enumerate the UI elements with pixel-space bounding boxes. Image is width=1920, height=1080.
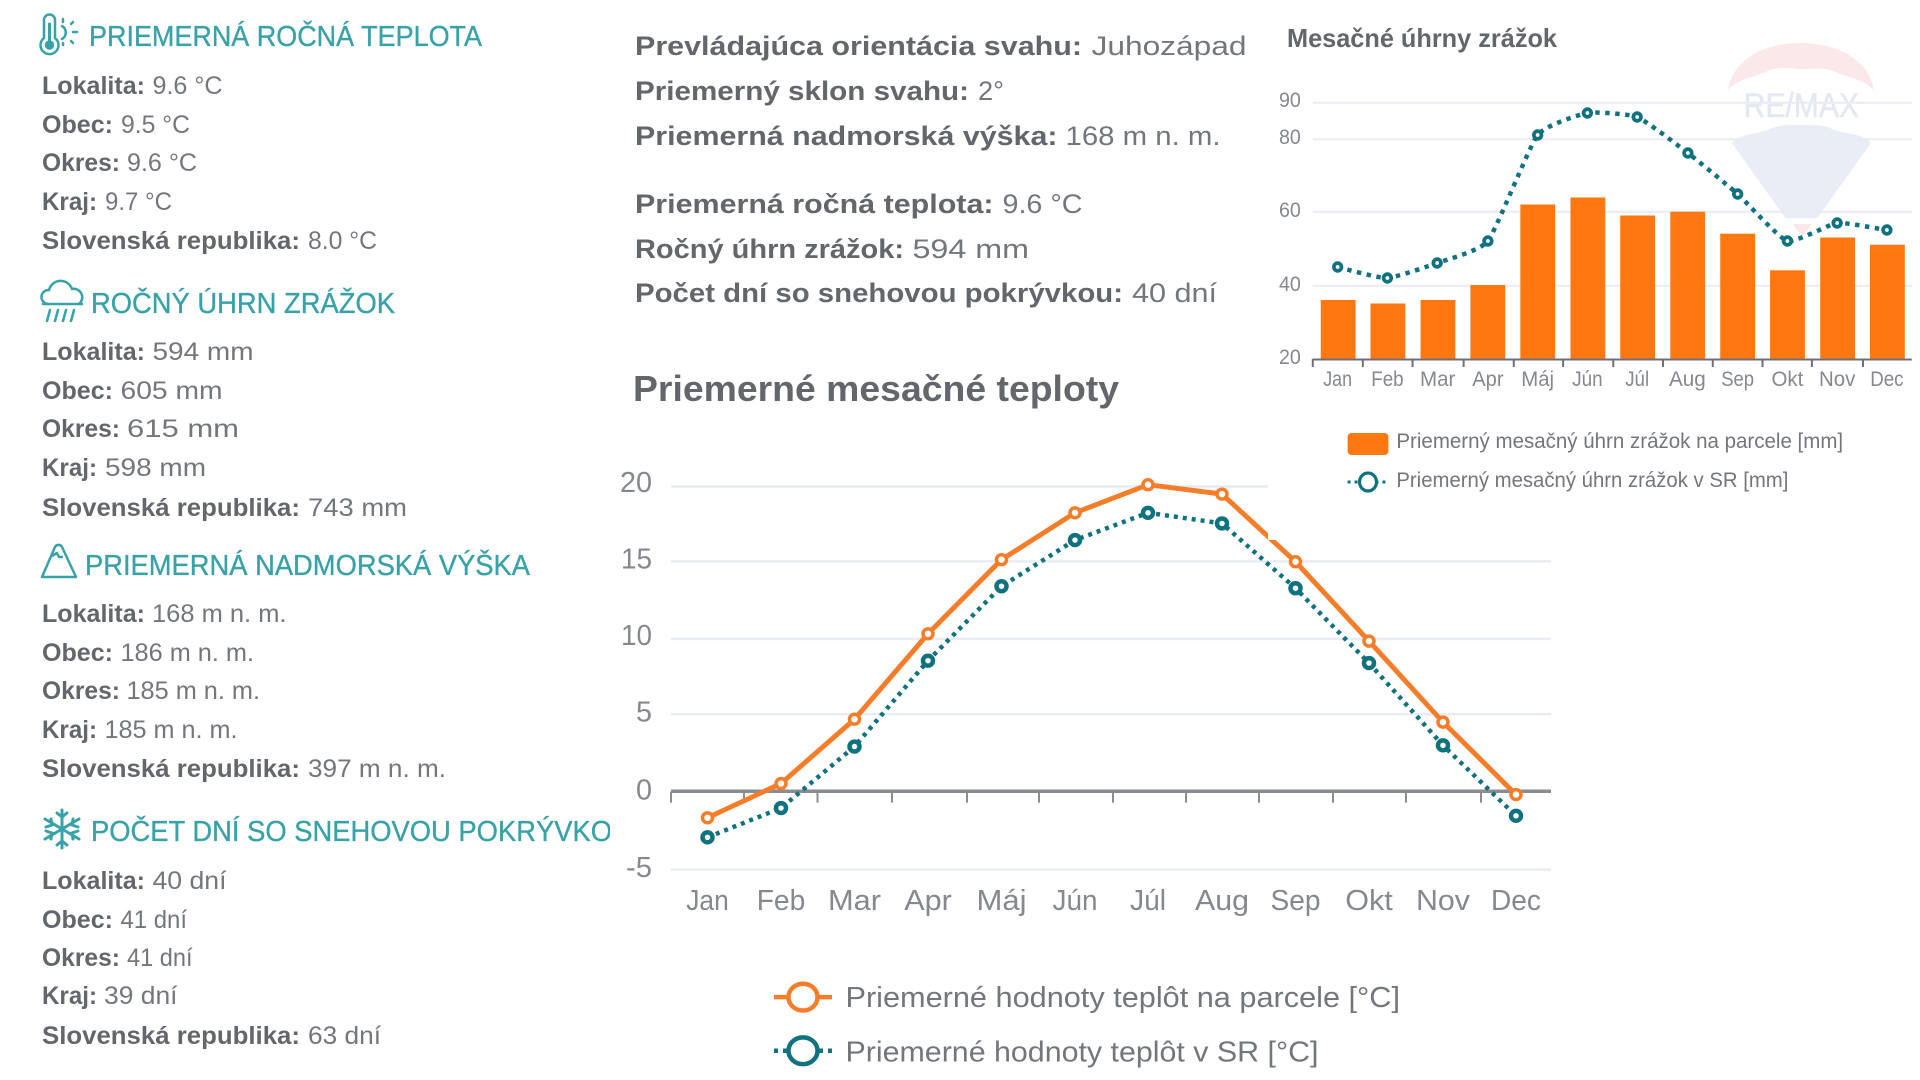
x axis labels: Dec bbox=[1491, 885, 1541, 917]
x axis labels: Mar bbox=[828, 885, 881, 917]
x axis labels: Aug bbox=[1669, 368, 1706, 391]
chart: monthly temperature line chart bbox=[620, 467, 1551, 1069]
watermark: RE/MAX balloon: RE/MAX bbox=[1744, 87, 1859, 125]
x axis with ticks bbox=[671, 791, 1551, 803]
y axis labels: 90 bbox=[1279, 89, 1301, 112]
data rows: 185 m n. m. bbox=[104, 716, 238, 744]
data rows: 615 mm bbox=[127, 415, 239, 443]
panel: days with snow cover bbox=[42, 810, 612, 1050]
data rows: Kraj: bbox=[42, 188, 97, 216]
y axis labels: 80 bbox=[1279, 126, 1301, 149]
heading: POČET DNÍ SO SNEHOVOU POKRÝVKO: POČET DNÍ SO SNEHOVOU POKRÝVKO bbox=[91, 814, 612, 848]
y axis labels: 15 bbox=[621, 543, 652, 575]
x axis labels: Jún bbox=[1572, 368, 1603, 391]
text block: site summary: 40 dní bbox=[1132, 278, 1218, 308]
y axis labels: -5 bbox=[626, 852, 652, 884]
x axis labels: Dec bbox=[1870, 368, 1904, 391]
data rows: 185 m n. m. bbox=[126, 677, 260, 705]
data rows: Lokalita: bbox=[42, 600, 145, 628]
data rows bbox=[42, 72, 377, 255]
y axis labels bbox=[620, 467, 652, 884]
data rows: 9.6 °C bbox=[127, 149, 197, 177]
grid lines bbox=[671, 486, 1551, 870]
y axis labels: 20 bbox=[620, 467, 652, 499]
panel: annual precipitation bbox=[41, 281, 407, 522]
data rows: Slovenská republika: bbox=[42, 755, 300, 783]
x axis labels: Júl bbox=[1625, 368, 1649, 391]
data rows: Kraj: bbox=[42, 982, 97, 1010]
text block: site summary: Prevládajúca orientácia svahu: bbox=[635, 31, 1082, 61]
text block: site summary: 594 mm bbox=[912, 234, 1029, 264]
data rows: Okres: bbox=[42, 677, 120, 705]
x axis labels: Mar bbox=[1420, 368, 1455, 391]
text block: site summary: Počet dní so snehovou pokrývkou: bbox=[635, 278, 1123, 308]
data rows: 40 dní bbox=[152, 867, 227, 895]
grid lines bbox=[1313, 103, 1912, 286]
x axis labels: Máj bbox=[976, 885, 1027, 917]
chart: monthly precipitation bars and line bbox=[1279, 89, 1912, 492]
y axis labels: 0 bbox=[636, 775, 652, 807]
y axis labels: 60 bbox=[1279, 199, 1301, 222]
data rows: 39 dní bbox=[104, 982, 178, 1010]
x axis labels: Júl bbox=[1130, 885, 1166, 917]
x axis labels: Jan bbox=[1323, 368, 1352, 391]
data rows: Okres: bbox=[42, 149, 120, 177]
x axis labels: Aug bbox=[1195, 885, 1249, 917]
y axis labels: 10 bbox=[621, 620, 652, 652]
x axis labels: Jan bbox=[686, 885, 729, 917]
x axis labels: Máj bbox=[1521, 368, 1554, 391]
heading: ROČNÝ ÚHRN ZRÁŽOK: ROČNÝ ÚHRN ZRÁŽOK bbox=[91, 286, 396, 320]
heading: monthly precipitation: Mesačné úhrny zrážok bbox=[1287, 23, 1558, 53]
legend: precipitation chart bbox=[1348, 430, 1843, 492]
data rows: Lokalita: bbox=[42, 72, 145, 100]
data rows: Obec: bbox=[42, 377, 113, 405]
data rows: 594 mm bbox=[152, 338, 254, 366]
data rows bbox=[42, 338, 407, 522]
data rows: 41 dní bbox=[120, 906, 187, 934]
data rows: 9.6 °C bbox=[152, 72, 222, 100]
data rows: 168 m n. m. bbox=[152, 600, 286, 628]
icon: rain cloud bbox=[41, 281, 82, 321]
data rows: Okres: bbox=[42, 944, 120, 972]
data rows: Obec: bbox=[42, 906, 113, 934]
data rows: 397 m n. m. bbox=[308, 755, 446, 783]
data rows bbox=[42, 867, 381, 1050]
x axis labels: Feb bbox=[757, 885, 805, 917]
x axis labels bbox=[686, 885, 1541, 917]
legend: temperature chart: Priemerné hodnoty teplôt na parcele [°C] bbox=[846, 982, 1400, 1014]
x axis labels: Nov bbox=[1819, 368, 1856, 391]
line: temperatures on the parcel bbox=[702, 480, 1521, 823]
x axis labels: Sep bbox=[1270, 885, 1321, 917]
white backing of the precipitation chart bbox=[1268, 0, 1920, 540]
data rows: 9.7 °C bbox=[105, 188, 172, 216]
text block: site summary: Juhozápad bbox=[1092, 31, 1246, 61]
panel: average annual temperature bbox=[40, 15, 483, 255]
data rows: Slovenská republika: bbox=[42, 1022, 300, 1050]
x axis labels: Sep bbox=[1721, 368, 1754, 391]
panel: average elevation bbox=[42, 545, 531, 783]
x axis labels bbox=[1323, 368, 1904, 391]
x axis labels: Apr bbox=[904, 885, 952, 917]
data rows: Slovenská republika: bbox=[42, 227, 300, 255]
icon: thermometer and sun bbox=[40, 15, 77, 54]
text block: site summary: Priemerná nadmorská výška: bbox=[635, 121, 1058, 151]
y axis labels: 40 bbox=[1279, 273, 1301, 296]
y axis labels: 5 bbox=[636, 697, 652, 729]
data rows: Lokalita: bbox=[42, 338, 145, 366]
data rows: 8.0 °C bbox=[308, 227, 377, 255]
legend: temperature chart: Priemerné hodnoty teplôt v SR [°C] bbox=[846, 1037, 1319, 1069]
heading: monthly temperatures: Priemerné mesačné teploty bbox=[633, 368, 1119, 409]
x axis with ticks bbox=[1313, 359, 1912, 367]
x axis labels: Jún bbox=[1052, 885, 1097, 917]
x axis labels: Okt bbox=[1345, 885, 1393, 917]
legend: precipitation chart: Priemerný mesačný úhrn zrážok v SR [mm] bbox=[1396, 469, 1788, 492]
icon: mountain bbox=[42, 545, 76, 577]
watermark: RE/MAX balloon bbox=[1728, 43, 1874, 237]
data rows: Slovenská republika: bbox=[42, 494, 300, 522]
text block: site summary: Priemerná ročná teplota: bbox=[635, 189, 994, 219]
y axis labels bbox=[1279, 89, 1301, 369]
line: precipitation in Slovakia bbox=[1334, 109, 1891, 282]
data rows: Lokalita: bbox=[42, 867, 145, 895]
text block: site summary: 2° bbox=[978, 76, 1004, 106]
heading: PRIEMERNÁ ROČNÁ TEPLOTA: PRIEMERNÁ ROČNÁ TEPLOTA bbox=[89, 19, 483, 53]
legend: precipitation chart: Priemerný mesačný úhrn zrážok na parcele [mm] bbox=[1396, 430, 1843, 453]
text block: site summary: Priemerný sklon svahu: bbox=[635, 76, 969, 106]
heading: PRIEMERNÁ NADMORSKÁ VÝŠKA: PRIEMERNÁ NADMORSKÁ VÝŠKA bbox=[85, 548, 531, 582]
data rows bbox=[42, 600, 446, 783]
data rows: 598 mm bbox=[105, 454, 206, 482]
data rows: 186 m n. m. bbox=[120, 639, 254, 667]
icon: snowflake bbox=[45, 810, 79, 848]
data rows: 63 dní bbox=[308, 1022, 381, 1050]
data rows: Obec: bbox=[42, 111, 113, 139]
text block: site summary: 9.6 °C bbox=[1002, 189, 1082, 219]
data rows: 743 mm bbox=[308, 494, 407, 522]
bars: precipitation on the parcel bbox=[1321, 198, 1905, 359]
x axis labels: Nov bbox=[1416, 885, 1471, 917]
line: temperatures in Slovakia bbox=[702, 508, 1521, 842]
text block: site summary: Ročný úhrn zrážok: bbox=[635, 234, 904, 264]
data rows: 605 mm bbox=[120, 377, 222, 405]
legend: temperature chart bbox=[774, 982, 1400, 1069]
text block: site summary: 168 m n. m. bbox=[1066, 121, 1220, 151]
x axis labels: Okt bbox=[1771, 368, 1803, 391]
y axis labels: 20 bbox=[1279, 346, 1301, 369]
data rows: Kraj: bbox=[42, 716, 97, 744]
data rows: 9.5 °C bbox=[121, 111, 190, 139]
x axis labels: Feb bbox=[1371, 368, 1404, 391]
x axis labels: Apr bbox=[1472, 368, 1504, 391]
data rows: Kraj: bbox=[42, 454, 97, 482]
text block: site summary bbox=[635, 31, 1246, 308]
data rows: Okres: bbox=[42, 415, 120, 443]
data rows: 41 dní bbox=[127, 944, 193, 972]
data rows: Obec: bbox=[42, 639, 113, 667]
